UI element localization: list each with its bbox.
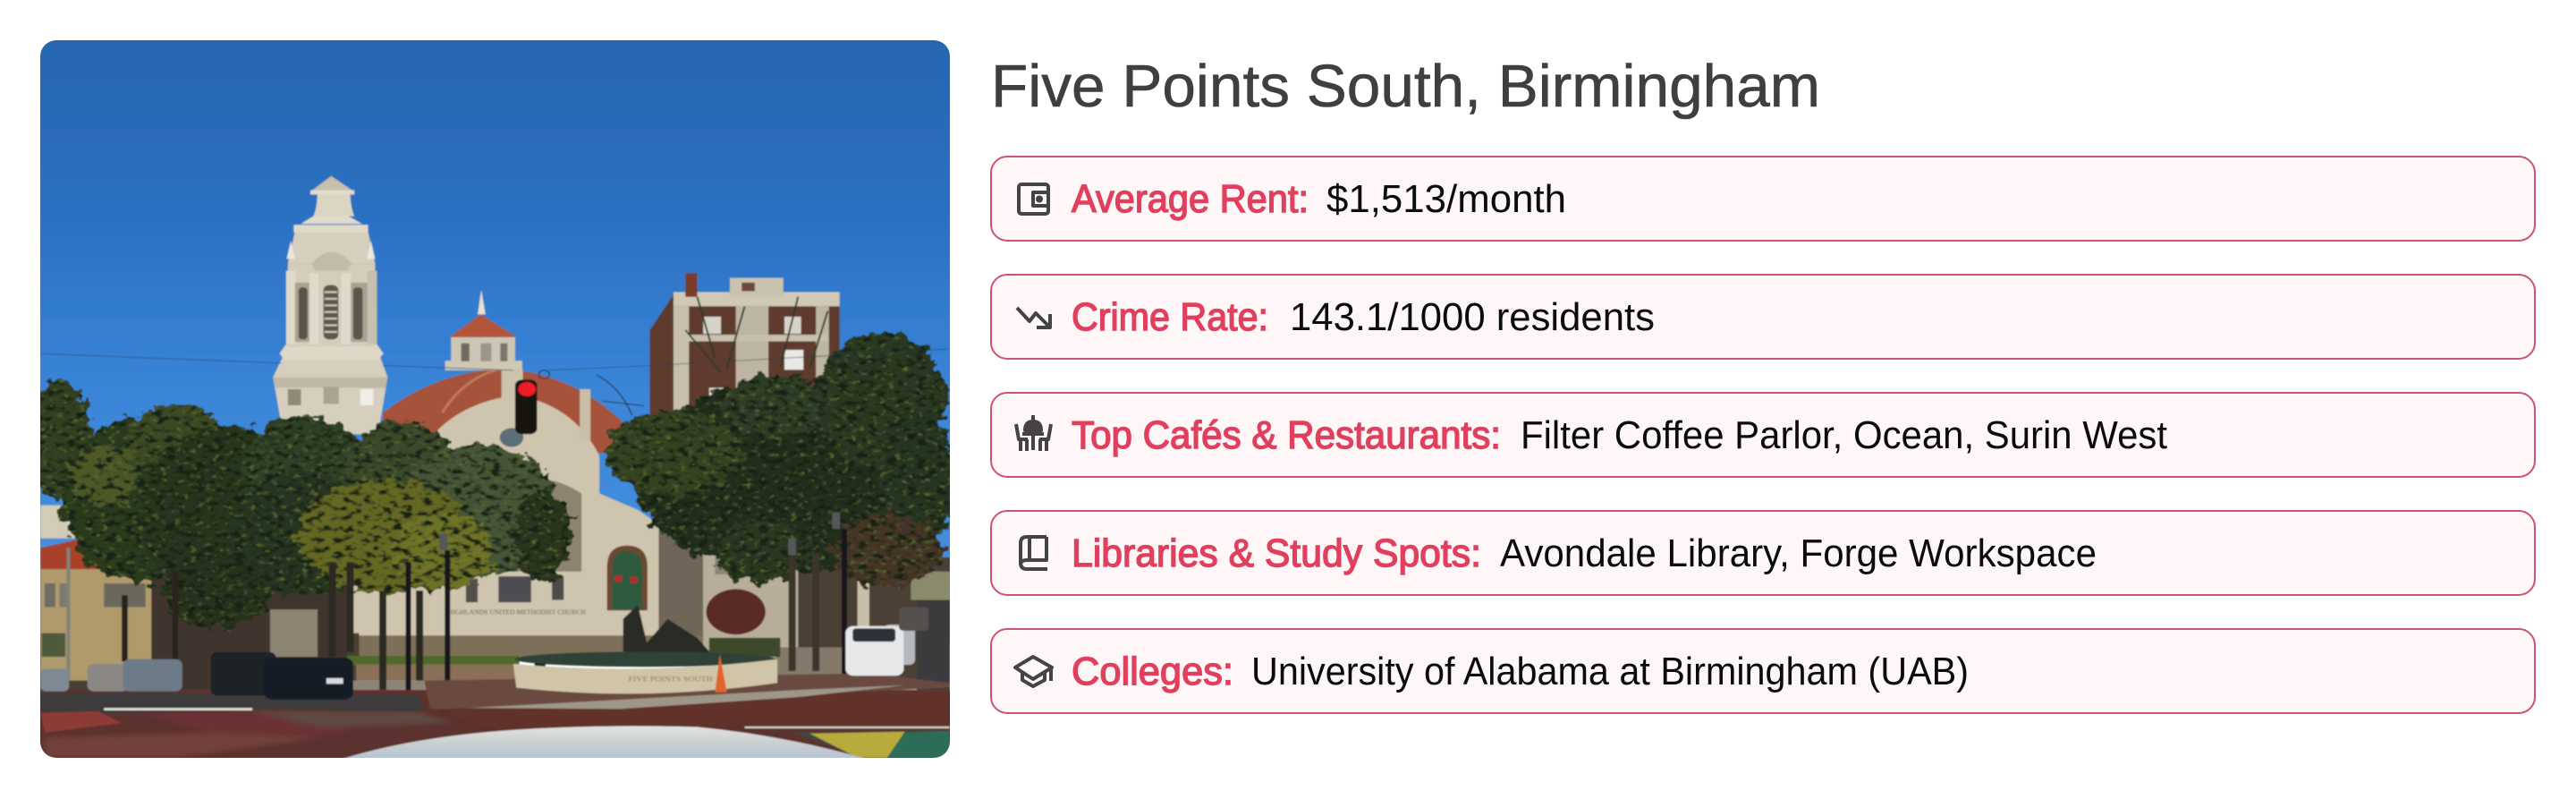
value: colleges list: University of Alabama at Birmingham (UAB) xyxy=(1251,650,1969,693)
card: colleges xyxy=(991,629,2535,713)
label: average rent: Average Rent: xyxy=(1072,177,1309,221)
church facade xyxy=(342,370,703,657)
label: top cafes and restaurants: Top Cafés & Restaurants: xyxy=(1072,413,1501,457)
card: top cafes and restaurants xyxy=(991,393,2535,477)
trees xyxy=(27,332,955,628)
label: colleges: Colleges: xyxy=(1072,650,1233,693)
card: libraries and study spots xyxy=(991,511,2535,595)
value: cafes list: Filter Coffee Parlor, Ocean, Surin West xyxy=(1521,413,2167,457)
icon: graduation cap xyxy=(1015,657,1052,686)
fountain: FIVE POINTS SOUTH xyxy=(629,676,713,683)
left brick building xyxy=(27,506,359,700)
church facade: HIGHLANDS UNITED METHODIST CHURCH xyxy=(448,608,586,616)
red shrub xyxy=(706,589,766,634)
icon: book xyxy=(1021,537,1047,569)
trunks and street lamps xyxy=(40,349,949,700)
icon: wallet xyxy=(1019,184,1048,214)
sky xyxy=(27,27,976,642)
church cupola and dome xyxy=(383,290,623,453)
fountain xyxy=(513,605,777,693)
label: libraries and study spots: Libraries & Study Spots: xyxy=(1072,531,1481,575)
photo: Five Points South church and fountain xyxy=(27,27,976,766)
church bell tower xyxy=(273,176,387,434)
value: crime rate: 143.1/1000 residents xyxy=(1290,295,1655,339)
icon: trending down xyxy=(1017,308,1050,327)
road surface xyxy=(40,673,950,758)
icon: dining table xyxy=(1016,415,1051,451)
value: rent: $1,513/month xyxy=(1326,177,1566,221)
value: libraries list: Avondale Library, Forge Workspace xyxy=(1500,531,2097,575)
lawn, wall and sidewalk xyxy=(347,638,859,694)
traffic light xyxy=(515,370,549,434)
card: average rent xyxy=(991,157,2535,241)
parked cars xyxy=(40,608,928,700)
card: crime rate xyxy=(991,275,2535,359)
label: crime rate: Crime Rate: xyxy=(1072,295,1268,339)
title: Five Points South, Birmingham xyxy=(991,53,1820,120)
right apartment building xyxy=(649,272,841,417)
right street buildings xyxy=(702,553,950,691)
car hood foreground xyxy=(338,727,870,761)
